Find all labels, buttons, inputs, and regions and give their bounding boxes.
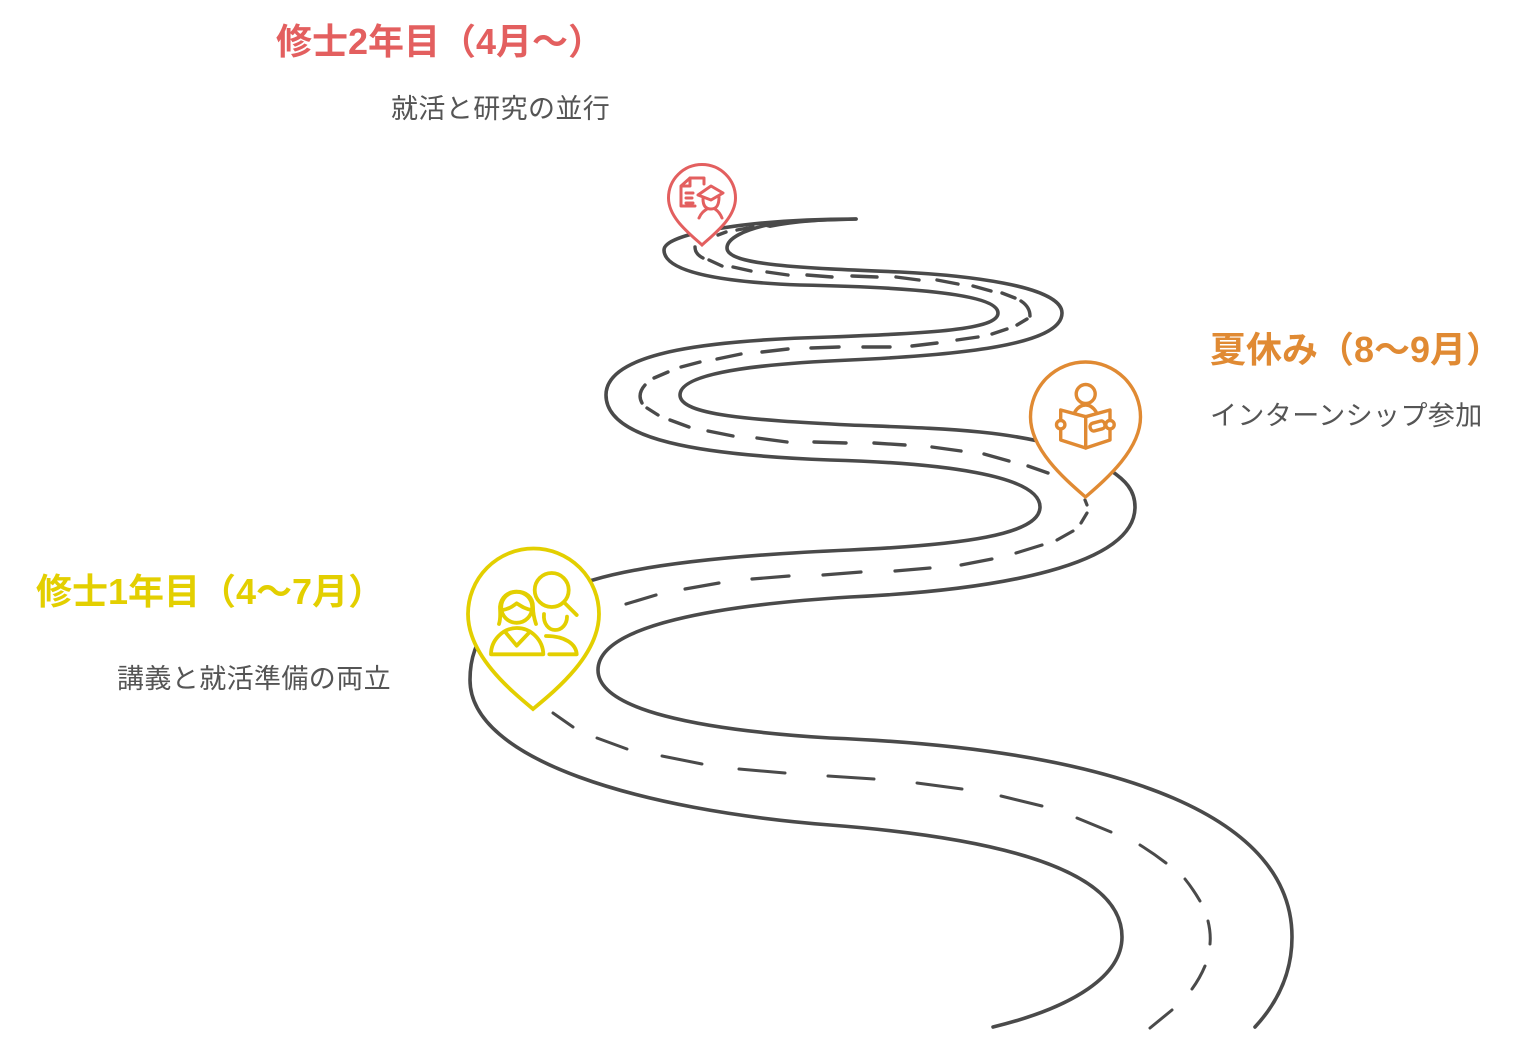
center line: farthest section xyxy=(695,227,1015,298)
center line: far section xyxy=(640,301,1048,473)
pin outline yellow xyxy=(468,548,599,709)
pin: 夏休み xyxy=(1030,362,1140,497)
pin: 修士2年目 xyxy=(668,164,736,245)
label: 修士1年目 xyxy=(36,571,391,694)
heading: 修士1年目（4〜7月） xyxy=(36,571,384,612)
road edge: inner xyxy=(598,219,1292,1027)
winding road xyxy=(470,218,1292,1028)
pin: 修士1年目 xyxy=(468,548,599,709)
icon: students with magnifier xyxy=(491,573,577,654)
label: 夏休み xyxy=(1210,329,1502,431)
heading: 夏休み（8〜9月） xyxy=(1210,329,1502,370)
description: 講義と就活準備の両立 xyxy=(117,664,391,694)
icon: person reading book xyxy=(1056,384,1114,448)
road taper at far end xyxy=(762,218,856,228)
icon: document and graduate xyxy=(681,178,723,218)
description: インターンシップ参加 xyxy=(1210,401,1483,431)
label: 修士2年目 xyxy=(276,21,610,124)
description: 就活と研究の並行 xyxy=(391,94,610,124)
pin outline red xyxy=(668,164,736,245)
pin outline orange xyxy=(1030,362,1140,497)
center line: near section xyxy=(553,713,1210,1028)
center line: middle section xyxy=(626,500,1087,604)
heading: 修士2年目（4月〜） xyxy=(276,21,604,62)
road edge: outer xyxy=(470,219,1122,1027)
